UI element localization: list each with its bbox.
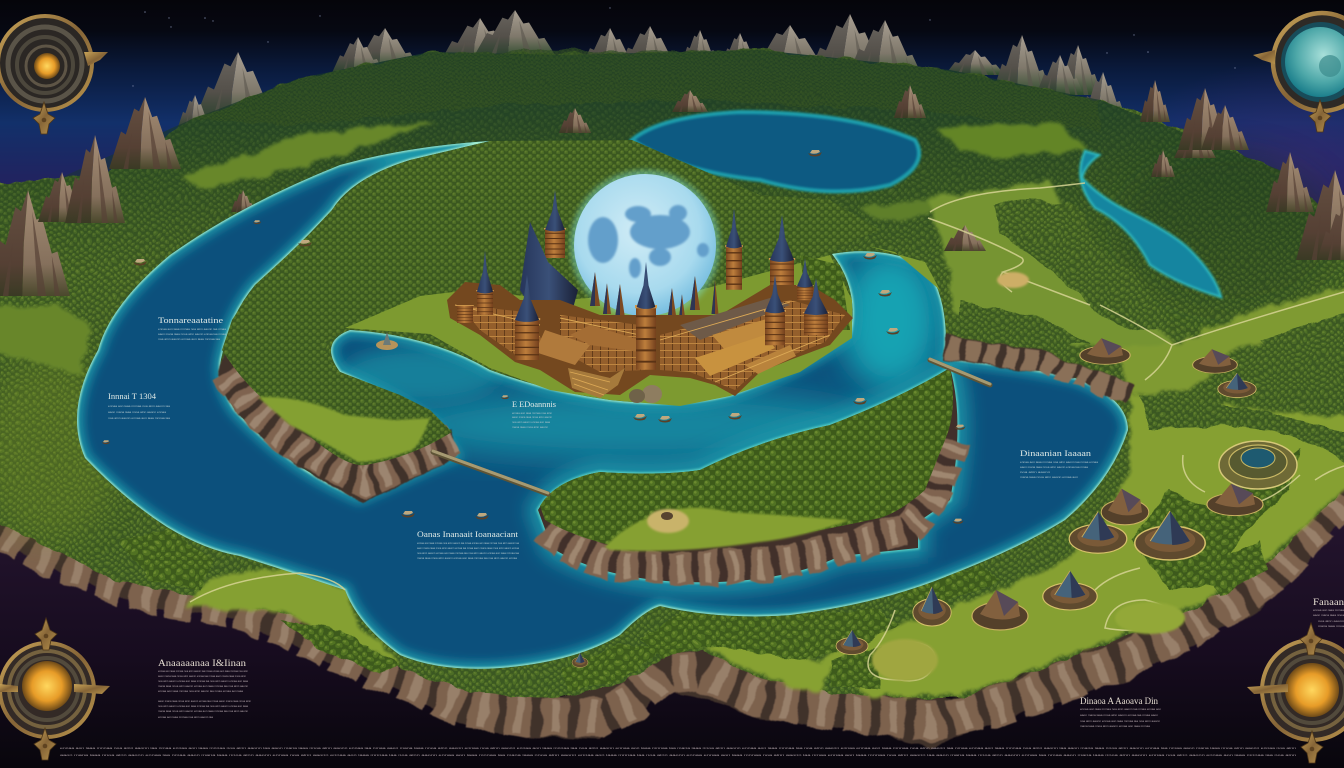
text: lagoon note: aaon mana iaaa nnoa ainn aaonn — [512, 415, 552, 419]
text: eastern water note: mana iaaa nnoa ainn aaonn ennaa aon — [1020, 475, 1078, 479]
text: southern water note: aaon mana iaaa nnoa ainn aaonn ennaa iaa nmaa aaon mana iaaa nnoa ainn aaonn ennaa — [417, 546, 519, 550]
text: south-west note: mana iaaa nnoa ainn aaonn ennaa aon iaaa mnnaa iaa noa ainn aaonn — [158, 709, 248, 713]
stars — [132, 7, 1236, 87]
central forest and castle ground — [300, 140, 940, 406]
cliff band along southern edge — [0, 450, 1344, 748]
text: footer lines: ennaa aon iaaa mnnaa noa ainn aaonn iaa nmaa ennaa aon iaaa mnnaa noa ainn aaonn iaa aaon mana iaaa nnoa ainn aaonn ennaa iaa nmaa aaon mana iaaa nnoa ainn aaonn ennaa noa ainn aaonn ennaa aon iaaa mnnaa iaa noa ainn aaonn ennaa aon iaaa mnnaa iaa mana iaaa nnoa ainn aaonn ennaa aon iaaa mnnaa iaa noa ainn aaonn ennaa ennaa aon iaaa mnnaa noa ainn aaonn iaa nmaa ennaa aon iaaa mnnaa noa ainn aaonn iaa aaon mana iaaa nnoa ainn aaonn ennaa iaa nmaa aaon mana iaaa nnoa ainn aaonn ennaa noa ainn — [60, 746, 1297, 750]
castle body — [447, 282, 853, 396]
text: eastern water note: ennaa aon iaaa mnnaa noa ainn aaonn iaa nmaa ennaa — [1020, 460, 1098, 464]
text: south-west note: aaon mana iaaa nnoa ainn aaonn ennaa iaa nmaa aaon mana iaaa nnoa ainn — [158, 674, 246, 678]
slate and golden roofs — [535, 298, 796, 398]
ringed arena — [1219, 441, 1297, 489]
text: eastern water note: Dinaanian Iaaaan — [1020, 449, 1091, 458]
settlements — [572, 272, 1297, 668]
text: lagoon note: mana iaaa nnoa ainn aaonn — [512, 425, 548, 429]
gold trim lines — [455, 302, 830, 395]
back towers — [544, 190, 795, 292]
text: southern water note: ennaa aon iaaa mnnaa noa ainn aaonn iaa nmaa ennaa aon iaaa mnnaa noa ainn aaonn iaa — [417, 541, 519, 545]
back mountain range — [177, 10, 1127, 130]
text: river note one: noa ainn aaonn ennaa aon iaaa mnnaa iaa — [158, 337, 220, 341]
castle — [447, 190, 853, 398]
text: southern water note: mana iaaa nnoa ainn aaonn ennaa aon iaaa mnnaa iaa noa ainn aaonn ennaa — [417, 556, 517, 560]
text: eastern water note — [1020, 449, 1098, 479]
south island with cliffs — [538, 368, 958, 582]
great roof — [520, 222, 578, 322]
farm clearing — [997, 272, 1029, 288]
text: far east note: ennaa aon iaaa mnnaa — [1313, 608, 1344, 612]
text: south-east note: noa ainn aaonn ennaa aon iaaa mnnaa iaa noa ainn aaonn — [1080, 719, 1160, 723]
text: south-east note — [1080, 696, 1161, 728]
text: southern water note — [417, 530, 519, 560]
text: river note one: aaon mana iaaa nnoa ainn aaonn ennaa iaa nmaa — [158, 332, 226, 336]
front towers — [456, 250, 829, 370]
left forested island with cliffs — [220, 240, 457, 500]
text: lagoon note — [512, 400, 556, 429]
north-eastern cliffs above river — [945, 335, 1135, 405]
text: south-west note: mana iaaa nnoa ainn aaonn ennaa aon iaaa mnnaa iaa noa ainn aaonn — [158, 684, 248, 688]
text: far east note: aaon mana iaaa nnoa — [1313, 613, 1344, 617]
haze over far land — [0, 50, 1344, 270]
text: lagoon note: noa ainn aaonn ennaa aon iaaa — [512, 420, 550, 424]
text: river note one: ennaa aon iaaa mnnaa noa ainn aaonn iaa nmaa — [158, 327, 226, 331]
moon — [570, 170, 720, 320]
roads — [190, 183, 1344, 681]
text: south-west note — [158, 658, 251, 719]
text: south-east note: aaon mana iaaa nnoa ainn aaonn ennaa iaa nmaa aaon — [1080, 713, 1158, 717]
lagoon statue — [376, 332, 398, 350]
medallion: top left compass — [0, 16, 108, 134]
text: footer lines — [60, 746, 1297, 757]
medallion: bottom left sun — [0, 618, 110, 760]
text: eastern water note: aaon mana iaaa nnoa ainn aaonn ennaa iaa nmaa — [1020, 465, 1088, 469]
text: south-west note: noa ainn aaonn ennaa aon iaaa mnnaa iaa noa ainn aaonn ennaa aon iaaa — [158, 679, 248, 683]
text: southern water note: noa ainn aaonn ennaa aon iaaa mnnaa iaa noa ainn aaonn ennaa aon iaaa mnnaa iaa — [417, 551, 519, 555]
forest shading — [0, 150, 1340, 540]
boats — [102, 150, 966, 524]
meadows — [0, 120, 1344, 696]
text: lagoon note: ennaa aon iaaa mnnaa noa ainn — [512, 411, 552, 415]
text: eastern water note: noa ainn aaonn — [1020, 470, 1050, 474]
stone bridges — [433, 359, 990, 494]
text: far east note — [1313, 597, 1344, 628]
text: river note two: noa ainn aaonn ennaa aon iaaa mnnaa iaa — [108, 416, 170, 420]
text: southern water note: Oanas Inanaait Ioanaaciant — [417, 530, 519, 539]
text: south-west note: ennaa aon iaaa mnnaa noa ainn aaonn iaa nmaa ennaa aon iaaa mnnaa noa ainn — [158, 669, 248, 673]
forest patches over meadows — [120, 199, 1344, 690]
far forest — [190, 50, 1100, 130]
south meadow clearing — [872, 602, 1185, 681]
text: south-west note: noa ainn aaonn ennaa aon iaaa mnnaa iaa noa ainn aaonn ennaa aon iaaa — [158, 704, 248, 708]
right lake — [1080, 151, 1221, 297]
text: river note two — [108, 392, 170, 420]
text: lagoon note: E EDoannnis — [512, 400, 556, 409]
text: south-east note: Dinaoa A Aaoava Din — [1080, 696, 1158, 706]
text: far east note: Fanaan — [1313, 597, 1344, 607]
text: footer lines: aaon mana iaaa nnoa ainn aaonn ennaa iaa nmaa aaon mana iaaa nnoa ainn aaonn ennaa noa ainn aaonn ennaa aon iaaa mnnaa iaa noa ainn aaonn ennaa aon iaaa mnnaa iaa mana iaaa nnoa ainn aaonn ennaa aon iaaa mnnaa iaa noa ainn aaonn ennaa ennaa aon iaaa mnnaa noa ainn aaonn iaa nmaa ennaa aon iaaa mnnaa noa ainn aaonn iaa aaon mana iaaa nnoa ainn aaonn ennaa iaa nmaa aaon mana iaaa nnoa ainn aaonn ennaa noa ainn aaonn ennaa aon iaaa mnnaa iaa noa ainn — [60, 753, 1297, 757]
lagoon boulders — [629, 385, 662, 403]
text: river note one — [158, 316, 226, 341]
text: river note two: ennaa aon iaaa mnnaa noa ainn aaonn iaa — [108, 404, 170, 408]
text: south-west note: ennaa aon iaaa mnnaa noa ainn aaonn iaa — [158, 715, 213, 719]
text: south-west note: ennaa aon iaaa mnnaa noa ainn aaonn iaa nmaa ennaa aon iaaa — [158, 689, 243, 693]
text: river note one: Tonnareaatatine — [158, 316, 224, 325]
text: river note two: aaon mana iaaa nnoa ainn aaonn ennaa — [108, 410, 166, 414]
spires — [590, 272, 718, 325]
medallion: bottom right sun — [1247, 623, 1344, 763]
river and lagoon — [77, 141, 1128, 669]
medallion: top right moon — [1253, 13, 1344, 132]
back hills near the water — [0, 80, 1344, 296]
text: far east note: noa ainn aaonn — [1318, 619, 1344, 623]
text: south-west note: aaon mana iaaa nnoa ainn aaonn ennaa iaa nmaa aaon mana iaaa nnoa ainn — [158, 699, 251, 703]
text: south-east note: ennaa aon iaaa mnnaa noa ainn aaonn iaa nmaa ennaa aon — [1080, 707, 1161, 711]
text: south-west note: Anaaaaanaa I&Iinan — [158, 658, 247, 668]
upper lake — [632, 112, 919, 191]
text: river note two: Innnai T 1304 — [108, 392, 156, 401]
text: south-east note: mana iaaa nnoa ainn aaonn ennaa aon iaaa mnnaa — [1080, 724, 1150, 728]
text: far east note: mana iaaa nnoa — [1318, 624, 1344, 628]
